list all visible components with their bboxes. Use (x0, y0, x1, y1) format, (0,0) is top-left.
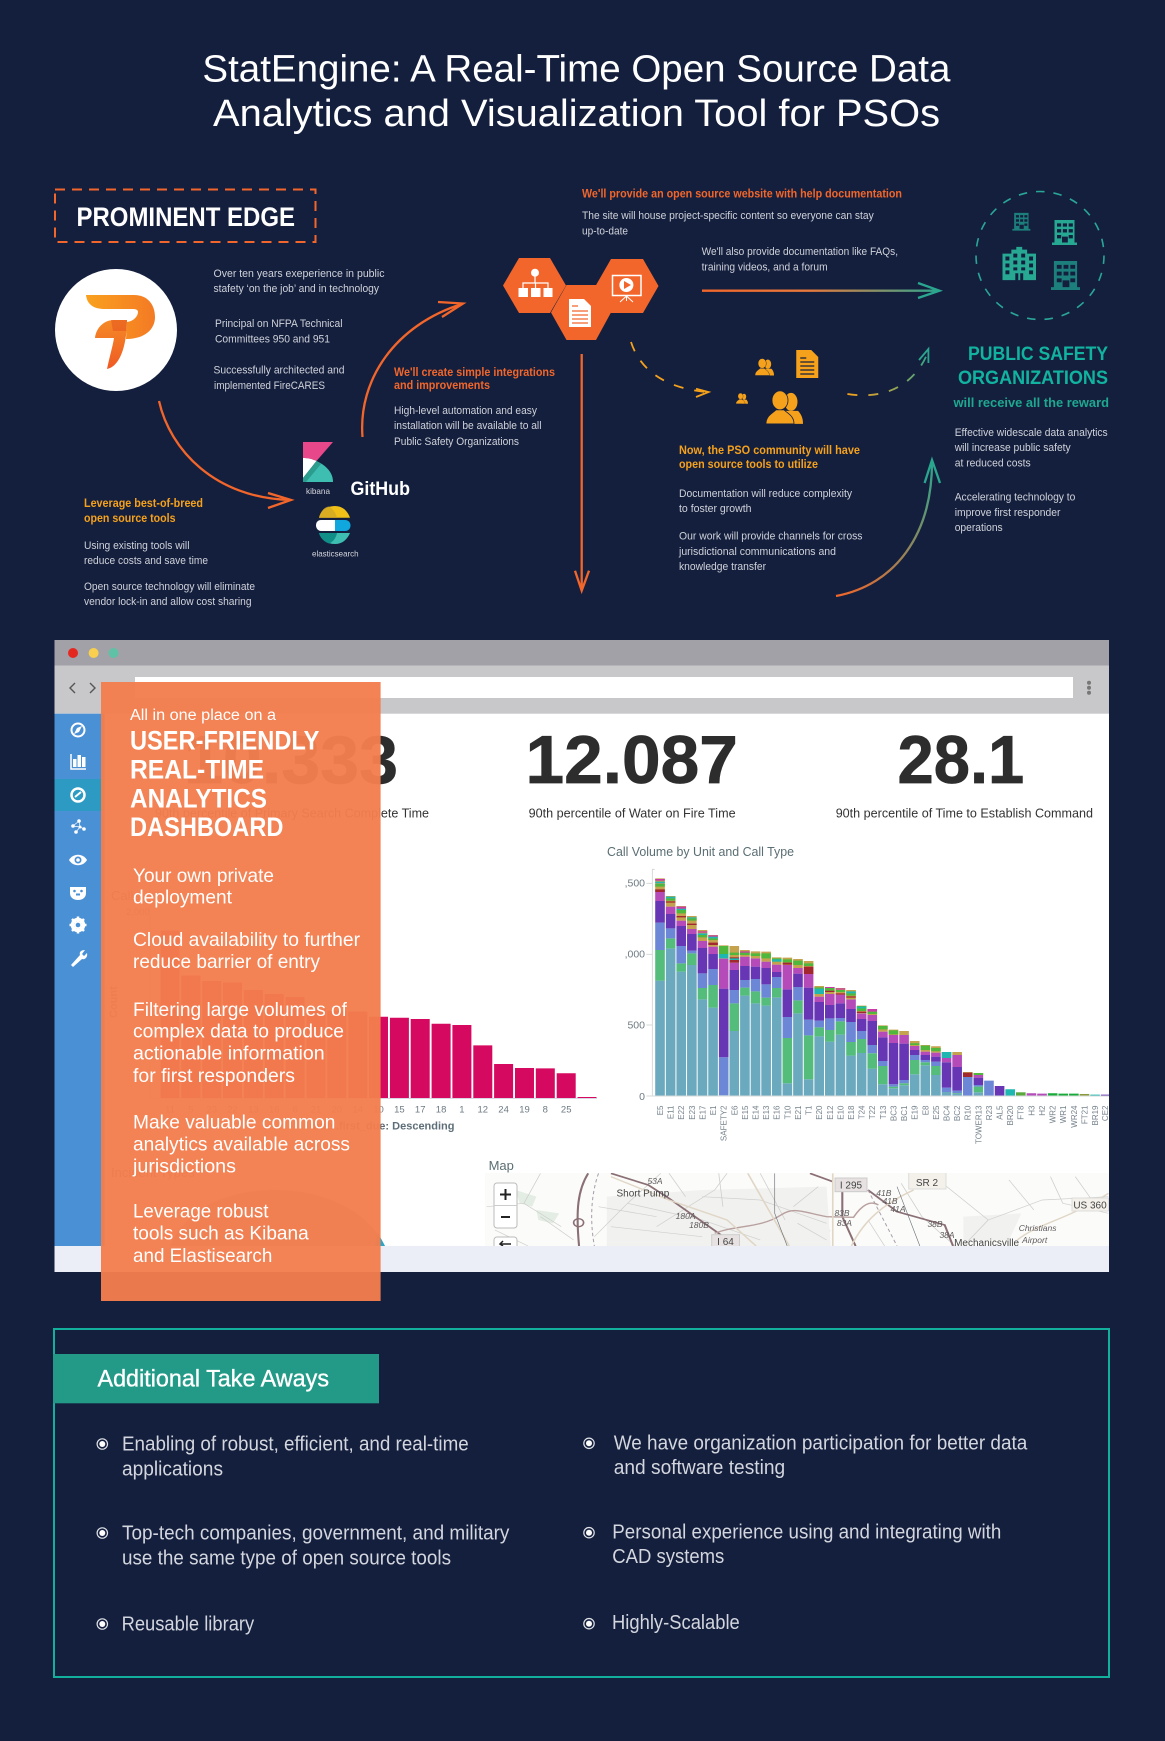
text block: integrations: installation will be available to all (394, 420, 542, 432)
bar chart: calls by first due: 13 (248, 1105, 259, 1116)
callout item: robust tools: tools such as Kibana (133, 1223, 309, 1245)
stacked bar chart: call volume by unit and call type: 0 (639, 1091, 645, 1103)
brand box: Prominent Edge (55, 190, 316, 242)
callout item: private deployment: Your own private (133, 865, 274, 887)
bar chart: calls by first due: 6 (292, 1105, 298, 1116)
bar chart: calls by first due: 2,000 (126, 907, 150, 918)
bar chart: calls by first due: 19 (519, 1105, 530, 1116)
chart x axis labels: BC2 (953, 1105, 962, 1121)
bar chart: calls by first due: 23 (206, 1105, 217, 1116)
text block: public safety organizations: improve first responder (955, 507, 1061, 519)
chart x axis labels: T24 (858, 1105, 867, 1119)
take aways header: Additional Take Aways (98, 1366, 329, 1393)
chart x axis labels: BC3 (889, 1105, 898, 1121)
take away: robust applications: Enabling of robust, efficient, and real-time (122, 1434, 469, 1456)
stat: time to establish command (836, 722, 1093, 821)
take away: organization participation (584, 1432, 1028, 1479)
chart x axis labels: E11 (667, 1105, 676, 1119)
map highway shields: I 295 (840, 1180, 863, 1192)
take away: same tools (97, 1522, 509, 1569)
chart x axis labels: FT8 (1017, 1105, 1026, 1120)
panel: orange dashboard callout: REAL-TIME (130, 755, 264, 785)
chart x axis labels: T1 (804, 1105, 814, 1115)
take away: CAD experience: Personal experience using and integrating with (612, 1521, 1001, 1543)
bar chart: calls by first due: 25 (561, 1105, 571, 1116)
map place labels: 83B (834, 1208, 850, 1218)
text block: PSO community: to foster growth (679, 503, 752, 515)
arrow: dashed hexagons to community (631, 342, 708, 397)
icon: elasticsearch logo: elasticsearch (312, 549, 359, 559)
text block: public safety organizations (953, 344, 1109, 534)
stat: primary search complete time: 90th percentile of Primary Search Complete Time (155, 806, 429, 821)
bar chart: calls by first due: 12 (478, 1105, 488, 1116)
chart x axis labels: E22 (677, 1105, 686, 1120)
chart x axis labels: R10 (964, 1105, 973, 1120)
text block: public safety organizations: Accelerating technology to (955, 492, 1075, 504)
callout item: private deployment (133, 865, 274, 909)
take away: robust applications (97, 1434, 469, 1480)
bar chart: calls by first due: 20 (332, 1105, 342, 1116)
icon: Prominent Edge logo (55, 269, 177, 391)
panel: browser window dashboard (54, 640, 1131, 1272)
text block: public safety organizations: Effective widescale data analytics (955, 427, 1108, 439)
bar chart: calls by first due: 5 (188, 1105, 194, 1116)
chart x axis labels: E21 (794, 1105, 803, 1120)
take away: CAD experience (584, 1521, 1001, 1568)
gauge chart: incident types: Incident Types (111, 1165, 195, 1180)
chart x axis labels: E15 (741, 1105, 750, 1120)
text block: open source website: We'll also provide documentation like FAQs, (702, 246, 898, 258)
chart x axis labels: E12 (826, 1105, 835, 1120)
stat: water on fire time: 12.087 (526, 722, 738, 798)
chart x axis labels: BC1 (900, 1105, 909, 1121)
text block: public safety organizations: PUBLIC SAFETY (968, 344, 1108, 365)
map place labels: 53A (647, 1176, 663, 1186)
text block: integrations: Public Safety Organizations (394, 436, 519, 448)
chart x axis labels: E18 (847, 1105, 856, 1120)
bar chart: calls by first due: 14 (352, 1105, 363, 1116)
chart x axis labels: E23 (688, 1105, 697, 1120)
icon: kibana logo: kibana (306, 486, 330, 496)
bar chart: calls by first due: 8 (543, 1105, 548, 1116)
stat: time to establish command: 90th percentile of Time to Establish Command (836, 806, 1093, 821)
map highway shields: US 360 (1073, 1200, 1107, 1212)
text block: integrations (394, 367, 555, 448)
map place labels: 180A (676, 1211, 696, 1221)
text block: public safety organizations: operations (955, 522, 1003, 534)
arrow: dashed community to public safety (847, 349, 928, 395)
text block: PSO community: Our work will provide channels for cross (679, 531, 863, 543)
bar chart: calls by first due (108, 880, 597, 1132)
callout item: cloud availability: reduce barrier of entry (133, 951, 320, 973)
take away: same tools: use the same type of open source tools (122, 1547, 451, 1569)
map panel: Map (489, 1158, 514, 1173)
bar chart: calls by first due: units.first_due: Descending (310, 1120, 454, 1132)
stat: water on fire time: 90th percentile of Water on Fire Time (529, 806, 736, 821)
chart x axis labels: E17 (698, 1105, 707, 1120)
stacked bar chart: call volume by unit and call type: 500 (627, 1020, 645, 1032)
take away: same tools: Top-tech companies, government, and military (122, 1522, 509, 1544)
panel: additional take aways (53, 1329, 1109, 1677)
stacked bar chart: call volume by unit and call type: ,500 (625, 878, 645, 890)
chart x axis labels: H2 (1038, 1105, 1047, 1116)
bar chart: calls by first due: 1 (459, 1105, 465, 1116)
callout item: robust tools: and Elastisearch (133, 1245, 272, 1267)
text block: PSO community: Now, the PSO community will have (679, 445, 860, 457)
title: StatEngine: A Real-Time Open Source Data (202, 49, 951, 91)
chart x axis labels: E10 (836, 1105, 845, 1120)
chart x axis labels: WR24 (1070, 1105, 1079, 1128)
text block: open source website: We'll provide an open source website with help documentation (582, 189, 902, 201)
map place labels: Short Pump (616, 1189, 670, 1200)
chart x axis labels: SAFETY2 (720, 1105, 729, 1141)
bar chart: calls by first due: 10 (373, 1105, 384, 1116)
callout item: common analytics: analytics available across (133, 1133, 350, 1155)
chart x axis labels: E25 (932, 1105, 941, 1120)
callout item: robust tools: Leverage robust (133, 1201, 269, 1223)
callout item: cloud availability: Cloud availability to further (133, 929, 360, 951)
chart x axis labels: CE2 (1101, 1105, 1110, 1121)
title: Analytics and Visualization Tool for PSOs (213, 93, 940, 135)
panel: orange dashboard callout: USER-FRIENDLY (130, 726, 319, 756)
arrow: tools to hexagons (362, 302, 463, 437)
arrow: logo to tools (159, 401, 291, 508)
icon cluster: community people and document (736, 350, 818, 424)
stat: primary search complete time (155, 722, 429, 821)
callout item: filtering data (133, 999, 348, 1087)
text block: open source website: up-to-date (582, 226, 628, 238)
map place labels: 41B (882, 1196, 898, 1206)
map place labels: 83A (837, 1218, 852, 1228)
callout item: filtering data: complex data to produce (133, 1021, 344, 1043)
callout item: common analytics: jurisdictions (132, 1156, 236, 1178)
take away: robust applications: applications (122, 1458, 223, 1480)
map place labels (616, 1176, 1057, 1249)
callout item: robust tools (133, 1201, 309, 1267)
text block: best-of-breed tools (84, 498, 255, 608)
text block: PSO community (678, 445, 863, 573)
stat: time to establish command: 28.1 (898, 722, 1024, 798)
map place labels: 41B (876, 1188, 892, 1198)
map highway shields: I 64 (717, 1237, 734, 1248)
map place labels: 41A (890, 1204, 906, 1214)
arrow: hexagons to public safety (702, 283, 940, 298)
map highway shields (712, 1170, 1108, 1249)
take away: organization participation: and software testing (614, 1457, 785, 1479)
chart x axis labels: BR19 (1091, 1105, 1100, 1126)
bar chart: calls by first due: Calls (111, 888, 140, 903)
chart x axis labels: T13 (879, 1105, 888, 1119)
map place labels: 180B (689, 1220, 709, 1230)
stacked bar chart: call volume by unit and call type: ,000 (625, 948, 645, 960)
stat: primary search complete time: 10.333 (184, 722, 398, 798)
callout item: private deployment: deployment (133, 887, 233, 909)
chart x axis labels: AL5 (996, 1105, 1004, 1120)
chart x axis labels: E16 (773, 1105, 782, 1120)
take away: organization participation: We have organization participation for better data (614, 1432, 1028, 1454)
chart x axis labels: WR1 (1059, 1105, 1068, 1123)
take away: CAD experience: CAD systems (612, 1546, 724, 1568)
text block: experience: Over ten years exeperience in public (214, 268, 385, 280)
chart x axis labels: E20 (815, 1105, 824, 1120)
map place labels: Christians (1019, 1223, 1057, 1233)
chart x axis labels: E5 (656, 1105, 665, 1115)
map zoom controls (494, 1182, 518, 1246)
chart x axis labels: E1 (709, 1105, 718, 1115)
bar chart: calls by first due: 22 (227, 1105, 238, 1116)
chart x axis labels: FT21 (1080, 1105, 1089, 1124)
text block: public safety organizations: at reduced costs (955, 458, 1031, 470)
text block: integrations: and improvements (394, 380, 490, 392)
callout item: common analytics (132, 1111, 350, 1178)
text block: open source website: The site will house project-specific content so everyone can stay (582, 210, 874, 222)
text block: experience (214, 268, 385, 392)
text block: public safety organizations: will receive all the reward (953, 395, 1109, 410)
chart x axis labels: T10 (783, 1105, 792, 1119)
text block: open source website (582, 189, 902, 274)
chart x axis labels: BR20 (1006, 1105, 1015, 1126)
text block: best-of-breed tools: reduce costs and save time (84, 555, 208, 567)
chart x axis labels (656, 1105, 1110, 1144)
bar chart: calls by first due: 21 (311, 1105, 321, 1116)
bar chart: calls by first due: 17 (415, 1105, 425, 1116)
callout item: filtering data: for first responders (133, 1065, 295, 1087)
bar chart: calls by first due: Count (108, 986, 120, 1018)
text block: integrations: High-level automation and easy (394, 405, 537, 417)
text block: best-of-breed tools: Leverage best-of-breed (84, 498, 203, 510)
callout item: common analytics: Make valuable common (133, 1111, 335, 1133)
icon cluster: buildings in dashed circle (976, 192, 1104, 320)
map place labels: Mechanicsville (954, 1238, 1020, 1249)
map place labels: 38B (927, 1219, 943, 1229)
text block: best-of-breed tools: vendor lock-in and allow cost sharing (84, 596, 252, 608)
text block: experience: Successfully architected and (214, 365, 344, 377)
chart x axis labels: E6 (730, 1105, 739, 1115)
text block: experience: Principal on NFPA Technical (215, 318, 342, 330)
icon: elasticsearch logo (312, 506, 359, 559)
browser chrome (54, 640, 1109, 1272)
chart x axis labels: H3 (1027, 1105, 1036, 1116)
bar chart: calls by first due: 16 (269, 1105, 280, 1116)
text block: best-of-breed tools: open source tools (84, 513, 176, 525)
text block: best-of-breed tools: Open source technology will eliminate (84, 581, 255, 593)
panel: orange dashboard callout: ANALYTICS (130, 783, 267, 813)
text block: PSO community: Documentation will reduce complexity (679, 488, 852, 500)
icon cluster: orange hexagons (503, 258, 658, 340)
chart x axis labels: E13 (762, 1105, 771, 1120)
chart x axis labels: WR2 (1049, 1105, 1058, 1123)
text block: best-of-breed tools: Using existing tools will (84, 540, 190, 552)
brand box: Prominent Edge: PROMINENT EDGE (76, 202, 295, 232)
take away: highly scalable: Highly-Scalable (612, 1612, 740, 1634)
text block: experience: implemented FireCARES (214, 380, 325, 392)
arrow: community up to public safety (836, 460, 940, 596)
take aways header (53, 1354, 379, 1403)
text block: PSO community: jurisdictional communications and (678, 546, 836, 558)
chart x axis labels: TOWER13 (974, 1105, 983, 1144)
chart x axis labels: BC4 (942, 1105, 952, 1121)
panel: orange dashboard callout: DASHBOARD (130, 812, 283, 842)
text block: PSO community: open source tools to utilize (679, 459, 818, 471)
text block: open source website: training videos, and a forum (702, 262, 828, 274)
map panel (486, 1161, 1109, 1246)
text block: experience: stafety ‘on the job’ and in technology (214, 283, 379, 295)
bar chart: calls by first due: 24 (498, 1105, 509, 1116)
callout item: cloud availability (133, 929, 360, 973)
sidebar navigation (54, 714, 104, 1246)
stacked bar chart: call volume by unit and call type (607, 844, 1131, 1144)
chart x axis labels: T22 (868, 1105, 877, 1119)
callout item: filtering data: Filtering large volumes of (133, 999, 348, 1021)
bar chart: calls by first due: 11 (165, 1105, 175, 1116)
map place labels: Airport (1021, 1235, 1048, 1245)
text block: public safety organizations: ORGANIZATIONS (958, 368, 1108, 389)
arrow: vertical down to dashboard (575, 354, 589, 591)
text block: public safety organizations: will increase public safety (954, 442, 1071, 454)
panel: orange dashboard callout: All in one place on a (130, 707, 276, 724)
stacked bar chart: call volume by unit and call type: Call Volume by Unit and Call Type (607, 844, 794, 859)
icon: GitHub wordmark: GitHub (350, 479, 410, 500)
title (202, 49, 951, 135)
gauge chart: incident types (111, 1165, 385, 1246)
text block: integrations: We'll create simple integrations (394, 367, 555, 379)
bar chart: calls by first due: 18 (436, 1105, 446, 1116)
callout item: filtering data: actionable information (133, 1043, 325, 1065)
icon: kibana logo (303, 442, 333, 496)
text block: experience: Committees 950 and 951 (215, 334, 330, 346)
map place labels: 38A (939, 1230, 955, 1240)
bar chart: calls by first due: 15 (394, 1105, 405, 1116)
take away: reusable library: Reusable library (122, 1614, 254, 1636)
chart x axis labels: E19 (911, 1105, 920, 1120)
chart x axis labels: R23 (985, 1105, 994, 1120)
panel: orange dashboard callout (101, 682, 381, 1301)
map highway shields: SR 2 (916, 1178, 939, 1189)
text block: PSO community: knowledge transfer (679, 561, 766, 573)
chart x axis labels: E14 (752, 1105, 760, 1120)
chart x axis labels: E8 (921, 1105, 930, 1115)
